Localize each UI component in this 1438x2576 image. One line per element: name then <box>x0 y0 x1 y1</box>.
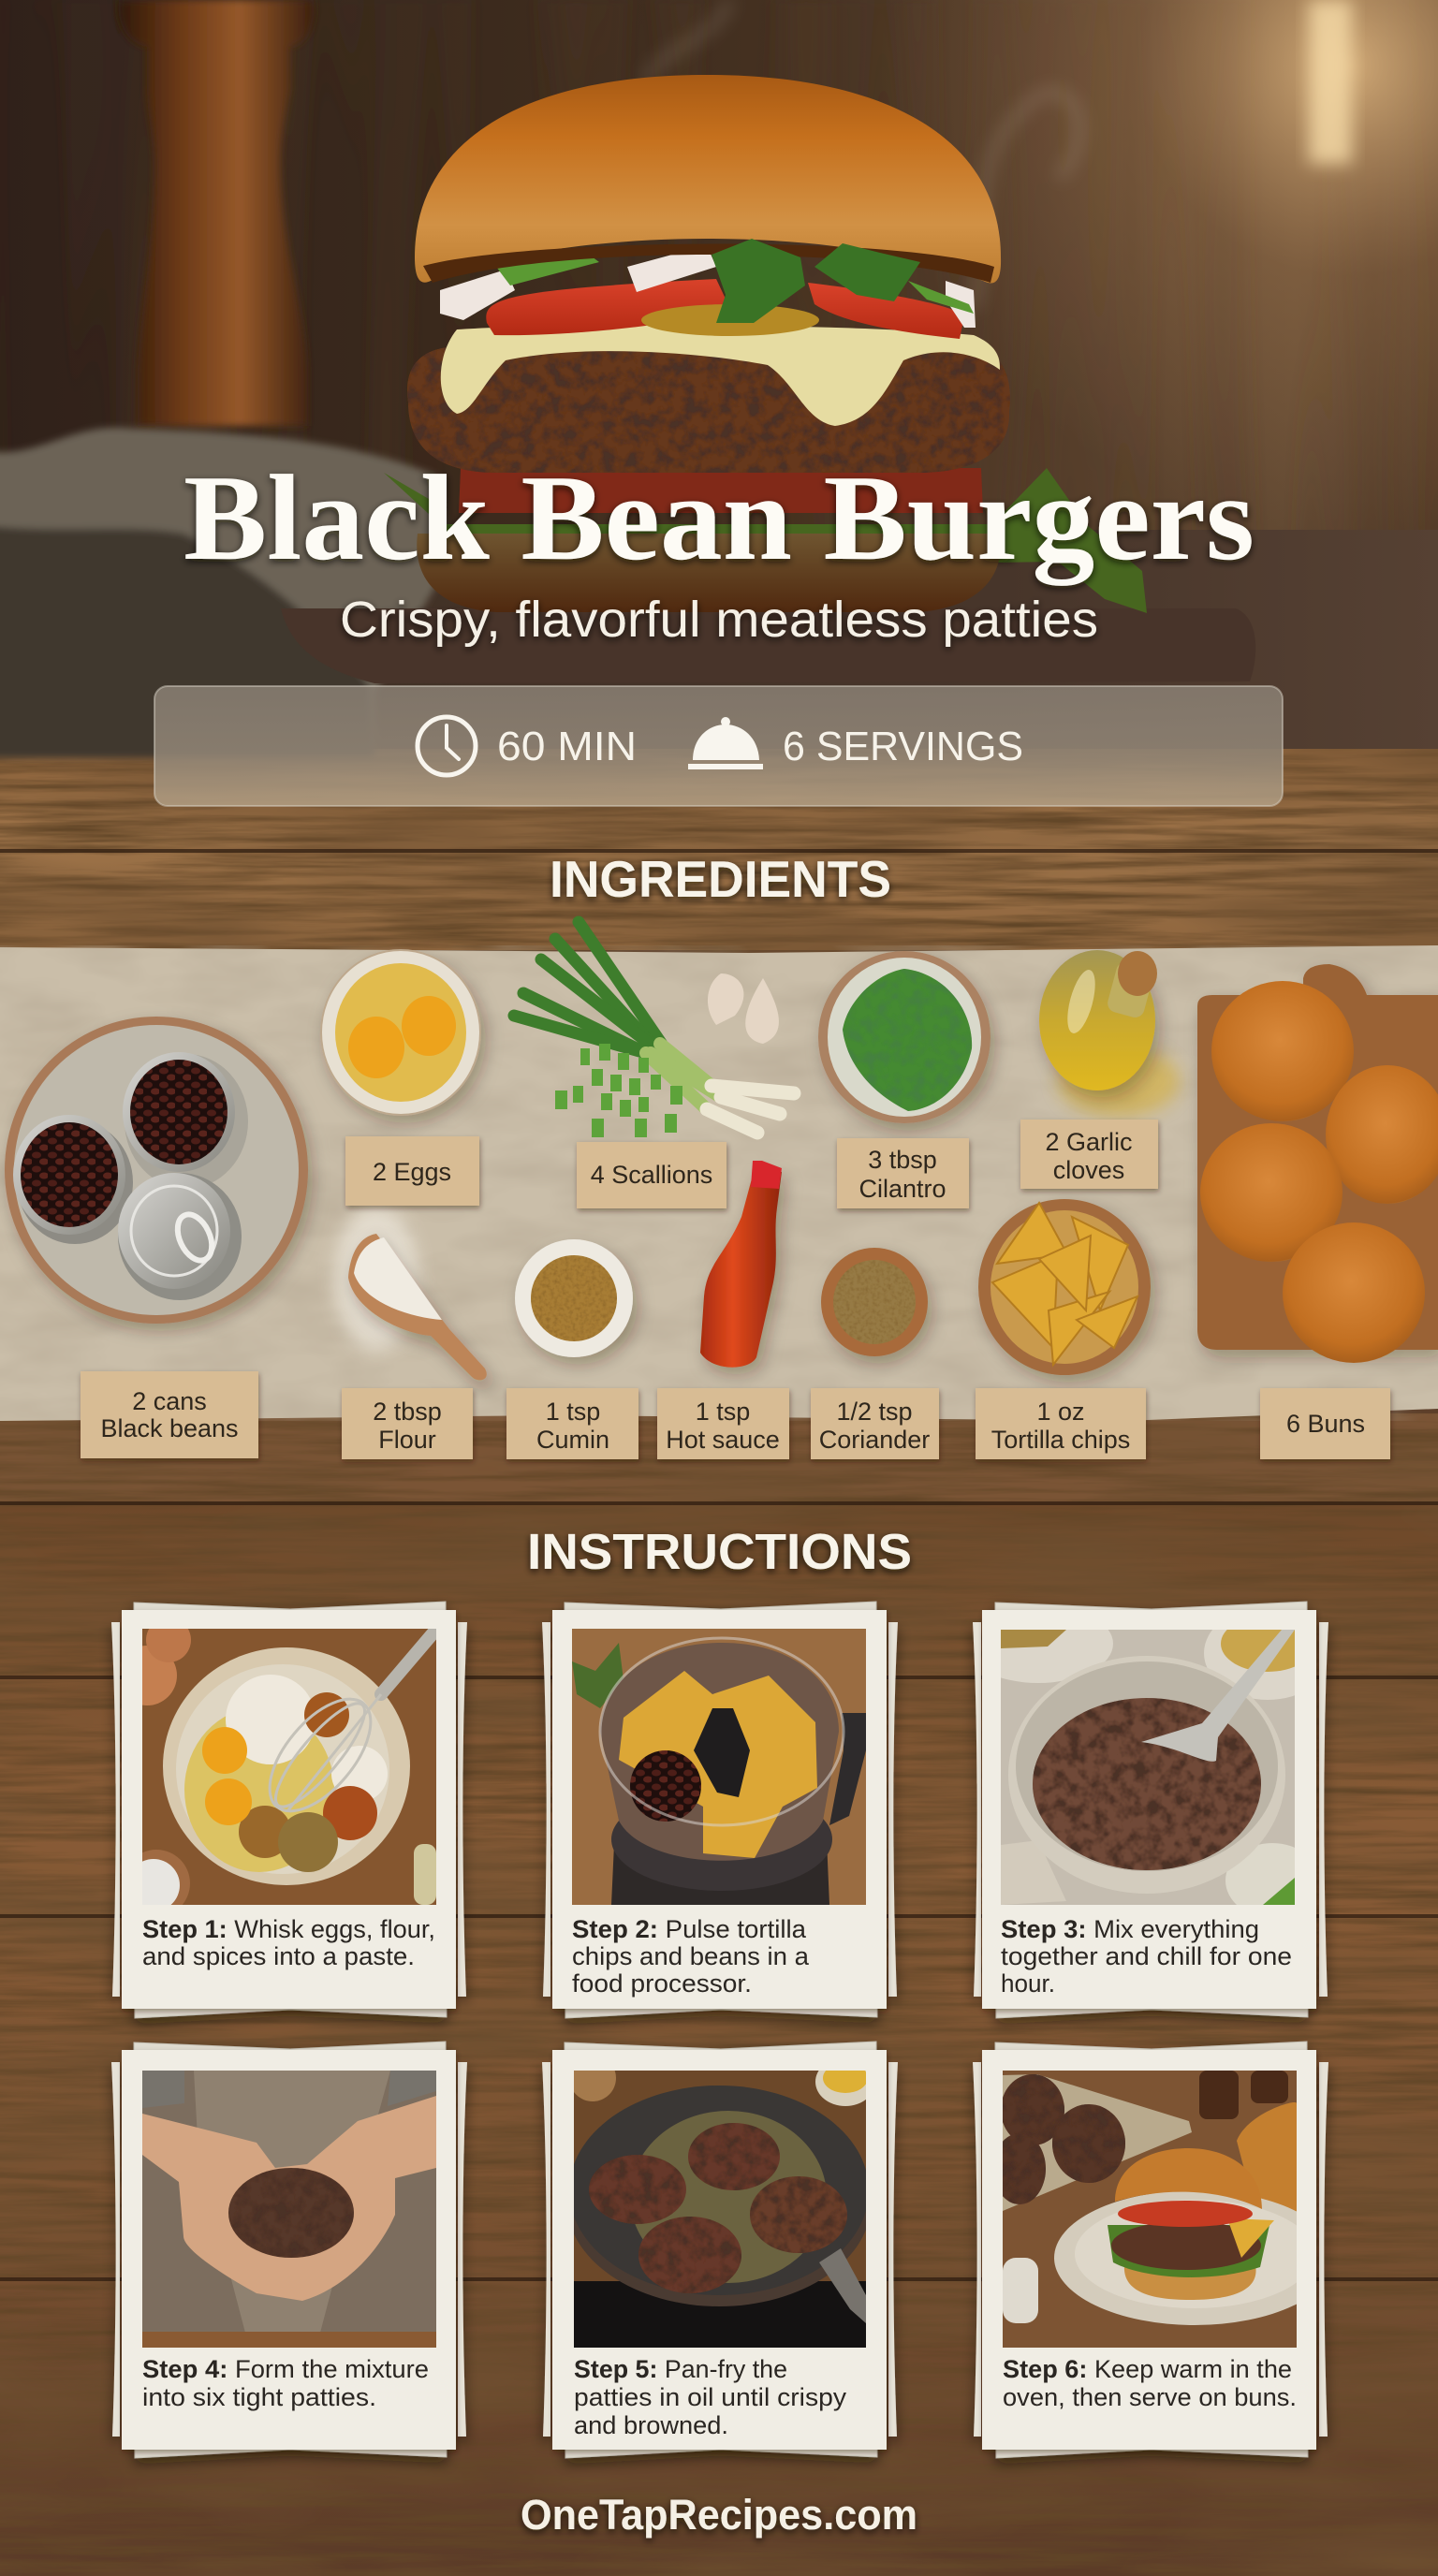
label: 1 tsp cumin: Cumin <box>536 1426 609 1454</box>
step 3 text: together and chill for one <box>1001 1942 1292 1970</box>
step card 5 <box>542 2042 898 2458</box>
label: 4 scallions: 4 Scallions <box>591 1161 712 1189</box>
step 4 text: into six tight patties. <box>142 2383 376 2411</box>
step card 2 <box>542 1602 898 2018</box>
step 6 text: Step 6: Keep warm in the <box>1003 2355 1292 2383</box>
step 3 text: hour. <box>1001 1969 1055 1998</box>
ingredient: coriander bowl <box>821 1248 928 1356</box>
steam <box>646 0 1079 309</box>
step 5 text: and browned. <box>574 2411 728 2439</box>
linen runner <box>0 945 1438 1421</box>
step 4 text <box>142 2355 429 2411</box>
patty <box>407 335 1010 473</box>
ingredient: scallions <box>514 922 794 1133</box>
step 3 text <box>1001 1915 1292 1998</box>
step 5 text: Step 5: Pan-fry the <box>574 2355 787 2383</box>
cilantro <box>712 239 920 323</box>
green pepper <box>496 248 974 314</box>
label: 1 oz tortilla chips <box>976 1388 1146 1459</box>
heading: ingredients: INGREDIENTS <box>550 850 891 908</box>
label: 2 garlic cloves: cloves <box>1053 1156 1124 1184</box>
step card 4 <box>111 2042 467 2458</box>
photo: hands holding a patty <box>142 2071 436 2348</box>
wood table background <box>0 739 1438 2576</box>
label: 2 tbsp flour: 2 tbsp <box>373 1398 442 1426</box>
ingredient: cumin bowl <box>515 1239 633 1357</box>
step 6 text: oven, then serve on buns. <box>1003 2383 1297 2411</box>
label: 2 cans black beans: Black beans <box>100 1414 239 1442</box>
label: 2 cans black beans: 2 cans <box>132 1387 207 1415</box>
cheese <box>441 325 1000 426</box>
ingredient: garlic cloves <box>708 973 779 1044</box>
photo: food processor with chips and beans <box>572 1629 866 1905</box>
relish <box>641 304 819 336</box>
step 4 text: Step 4: Form the mixture <box>142 2355 429 2383</box>
pepper mill <box>119 0 315 426</box>
label: 1/2 tsp coriander <box>811 1388 939 1459</box>
label: 1/2 tsp coriander: 1/2 tsp <box>836 1398 913 1426</box>
bottom bun <box>417 534 1001 612</box>
label: 2 garlic cloves <box>1020 1120 1158 1189</box>
step 2 text <box>572 1915 810 1998</box>
photo: bean mixture in bowl <box>1001 1630 1295 1905</box>
step 2 text: food processor. <box>572 1969 752 1998</box>
label: 1 tsp cumin: 1 tsp <box>546 1398 600 1426</box>
photo: patties frying in pan <box>574 2071 866 2348</box>
ingredient: chopped scallions <box>555 1044 682 1137</box>
ingredient: black bean cans on plate <box>5 1017 308 1324</box>
label: 4 scallions <box>577 1142 726 1208</box>
icon: clock <box>418 717 476 775</box>
step 3 text: Step 3: Mix everything <box>1001 1915 1259 1943</box>
ingredient: olive oil bottle <box>1039 950 1180 1117</box>
step 6 text <box>1003 2355 1297 2411</box>
label: 1 tsp hot sauce <box>657 1388 789 1459</box>
label: 2 tbsp flour <box>342 1388 473 1459</box>
hero panel: burger photo <box>0 0 1438 758</box>
step card 6 <box>973 2042 1335 2458</box>
label: 2 cans black beans <box>81 1371 258 1458</box>
step 1 text <box>142 1915 435 1970</box>
step 5 text <box>574 2355 847 2439</box>
label: 1 oz tortilla chips: 1 oz <box>1036 1398 1085 1426</box>
top bun <box>415 75 1001 283</box>
onion <box>440 245 976 328</box>
label: 1 tsp cumin <box>506 1388 638 1459</box>
step 5 text: patties in oil until crispy <box>574 2383 847 2411</box>
ingredient: eggs in bowl <box>321 950 480 1115</box>
prep time: 60 MIN <box>497 724 637 769</box>
step card 1 <box>111 1602 467 2018</box>
tomato slices <box>486 279 730 335</box>
label: 1/2 tsp coriander: Coriander <box>819 1426 930 1454</box>
footer website: OneTapRecipes.com <box>521 2491 917 2539</box>
label: 6 buns <box>1260 1388 1390 1459</box>
label: 1 tsp hot sauce: 1 tsp <box>696 1398 750 1426</box>
info bar <box>154 686 1283 806</box>
icon: serving cloche <box>688 717 763 769</box>
panel: ingredients on linen runner <box>0 922 1438 1459</box>
photo: burger served on plate <box>1003 2071 1297 2348</box>
step 1 text: and spices into a paste. <box>142 1942 415 1970</box>
step 1 text: Step 1: Whisk eggs, flour, <box>142 1915 435 1943</box>
step 2 text: Step 2: Pulse tortilla <box>572 1915 807 1943</box>
label: 1 oz tortilla chips: Tortilla chips <box>991 1426 1130 1454</box>
ingredient: tortilla chips bowl <box>978 1199 1151 1375</box>
step card 3 <box>963 1602 1331 2018</box>
label: 1 tsp hot sauce: Hot sauce <box>666 1426 780 1454</box>
ingredient: hot sauce bottle <box>700 1161 782 1368</box>
subtitle: Crispy, flavorful meatless patties <box>340 592 1098 648</box>
wooden serving board <box>281 608 1255 683</box>
photo: whisking eggs, flour and spices <box>142 1629 436 1905</box>
label: 2 garlic cloves: 2 Garlic <box>1045 1128 1133 1156</box>
label: 2 eggs <box>345 1136 479 1206</box>
label: 3 tbsp cilantro: Cilantro <box>858 1175 946 1203</box>
burger <box>384 75 1147 613</box>
label: 3 tbsp cilantro: 3 tbsp <box>868 1146 937 1174</box>
hero backdrop <box>0 0 1438 749</box>
label: 2 tbsp flour: Flour <box>378 1426 436 1454</box>
label: 3 tbsp cilantro <box>837 1138 969 1208</box>
label: 6 buns: 6 Buns <box>1286 1410 1365 1438</box>
ingredient: flour scoop <box>334 1205 487 1380</box>
servings: 6 SERVINGS <box>783 724 1023 769</box>
lettuce <box>384 468 1147 613</box>
label: 2 eggs: 2 Eggs <box>373 1158 451 1186</box>
ingredient: buns on cutting board <box>1197 964 1438 1363</box>
lower tomato <box>459 468 983 513</box>
linen napkin <box>0 428 449 758</box>
title: Black Bean Burgers <box>183 450 1255 586</box>
step 2 text: chips and beans in a <box>572 1942 810 1970</box>
ingredient: cilantro in bowl <box>818 951 990 1123</box>
heading: instructions: INSTRUCTIONS <box>527 1524 912 1580</box>
